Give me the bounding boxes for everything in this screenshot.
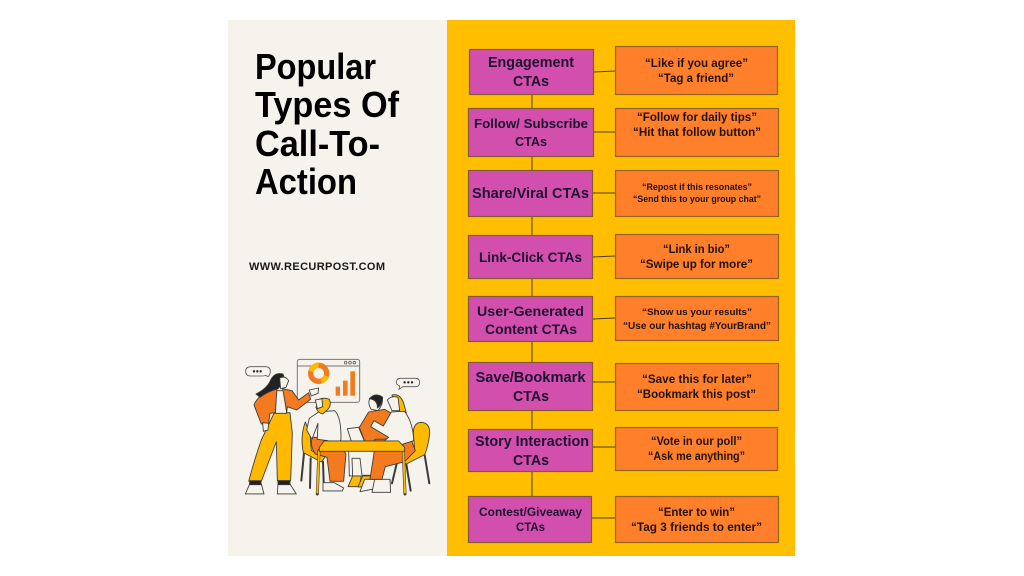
- box: contest examples: [616, 496, 778, 542]
- icon: presentation window with charts: [297, 359, 360, 402]
- step 1: engagement: [470, 46, 778, 94]
- panel: left cream background: [228, 20, 447, 556]
- box: story interaction CTAs: Story Interaction: [475, 434, 589, 450]
- figure: standing woman presenter: [245, 374, 319, 494]
- box: engagement examples: [616, 46, 778, 94]
- step 7: story: [468, 428, 778, 472]
- box: engagement examples: “Like if you agree”: [645, 58, 748, 70]
- box: story interaction CTAs: [468, 430, 592, 472]
- box: save/bookmark CTAs: [468, 362, 592, 410]
- box: contest/giveaway CTAs: CTAs: [516, 520, 545, 534]
- panel: right yellow background: [447, 20, 795, 556]
- icon: left speech bubble: [246, 367, 270, 377]
- box: user-generated examples: “Show us your results”: [642, 307, 752, 318]
- figure: laptop: [347, 427, 365, 443]
- box: save/bookmark CTAs: CTAs: [513, 389, 549, 405]
- box: follow examples: [616, 108, 778, 156]
- box: engagement examples: “Tag a friend”: [658, 73, 734, 85]
- box: story interaction CTAs: CTAs: [513, 453, 549, 469]
- box: user-generated content CTAs: User-Generated: [477, 304, 584, 319]
- box: contest/giveaway CTAs: Contest/Giveaway: [479, 505, 582, 519]
- box: contest examples: “Enter to win”: [658, 507, 735, 519]
- title: Popular: [255, 46, 376, 87]
- box: share examples: “Repost if this resonates”: [642, 182, 752, 192]
- box: save/bookmark CTAs: Save/Bookmark: [476, 370, 586, 386]
- illustration: team meeting: [245, 359, 430, 494]
- figure: woman seated right: [360, 395, 415, 492]
- flow connectors: [532, 71, 615, 518]
- box: user-generated examples: [616, 296, 778, 340]
- box: engagement CTAs: CTAs: [513, 74, 549, 90]
- box: share/viral CTAs: Share/Viral CTAs: [472, 186, 589, 202]
- icon: right speech bubble: [396, 378, 420, 389]
- box: user-generated content CTAs: Content CTAs: [485, 322, 577, 337]
- box: user-generated content CTAs: [468, 296, 592, 342]
- step 5: user-generated: [468, 296, 778, 342]
- box: follow/subscribe CTAs: Follow/ Subscribe: [474, 116, 588, 131]
- title: [255, 46, 400, 202]
- box: user-generated examples: “Use our hashtag #YourBrand”: [623, 321, 771, 332]
- figure: seated man: [307, 398, 346, 491]
- step 4: link-click: [468, 234, 778, 278]
- box: engagement CTAs: Engagement: [488, 55, 574, 71]
- box: story examples: [616, 428, 778, 470]
- title: Action: [255, 161, 357, 202]
- box: story examples: “Ask me anything”: [648, 451, 745, 463]
- website url: WWW.RECURPOST.COM: [249, 261, 385, 273]
- title: Types Of: [255, 84, 400, 125]
- box: share examples: “Send this to your group chat”: [633, 194, 761, 204]
- box: link-click examples: “Swipe up for more”: [640, 259, 753, 271]
- box: follow examples: “Hit that follow button”: [633, 127, 761, 139]
- box: contest/giveaway CTAs: [468, 496, 592, 542]
- figure: person with dark hair: [348, 395, 393, 487]
- step 8: contest: [468, 496, 778, 542]
- box: story examples: “Vote in our poll”: [651, 436, 742, 448]
- box: contest examples: “Tag 3 friends to enter”: [631, 522, 762, 534]
- box: follow/subscribe CTAs: CTAs: [515, 134, 547, 149]
- step 6: save: [468, 362, 778, 410]
- box: link-click CTAs: Link-Click CTAs: [479, 250, 582, 265]
- step 3: share: [468, 170, 778, 216]
- figure: table: [317, 441, 405, 494]
- box: share/viral CTAs: [468, 170, 592, 216]
- box: link-click examples: “Link in bio”: [663, 244, 730, 256]
- box: share examples: [616, 170, 778, 216]
- box: save examples: [616, 364, 778, 410]
- box: save examples: “Bookmark this post”: [637, 389, 756, 401]
- box: save examples: “Save this for later”: [642, 374, 752, 386]
- step 2: follow: [468, 108, 778, 156]
- box: engagement CTAs: [470, 50, 594, 94]
- box: link-click examples: [616, 234, 778, 278]
- figure: right chair: [392, 422, 430, 491]
- box: follow/subscribe CTAs: [468, 108, 594, 156]
- box: follow examples: “Follow for daily tips”: [637, 112, 757, 124]
- title: Call-To-: [255, 123, 380, 164]
- box: link-click CTAs: [468, 236, 592, 278]
- figure: left chair: [301, 422, 325, 488]
